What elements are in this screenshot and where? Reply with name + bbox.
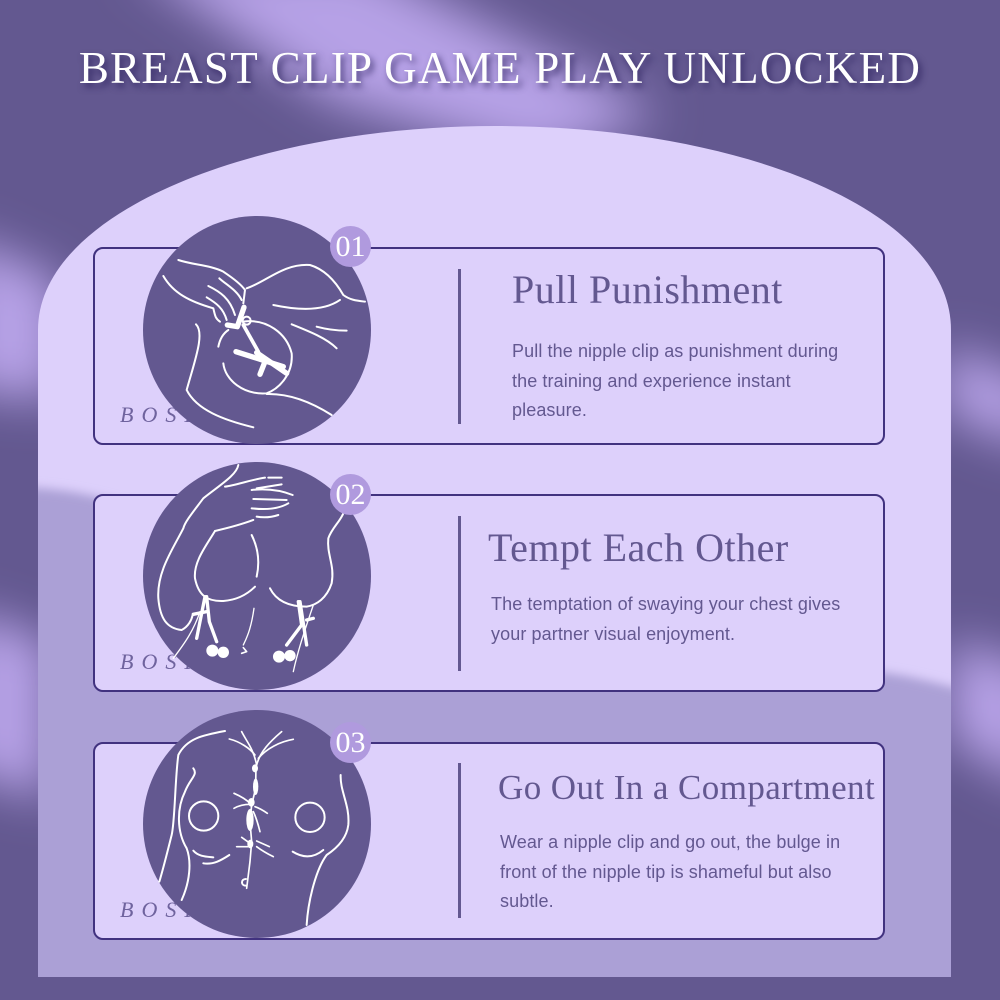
- badge 02: [330, 474, 371, 515]
- divider 1: [458, 269, 461, 424]
- watermark 1: BOSIN: [120, 402, 222, 427]
- text 3: front of the nipple tip is shameful but also: [500, 862, 832, 882]
- text 1: Pull the nipple clip as punishment during: [512, 341, 838, 361]
- text 3: [500, 832, 840, 911]
- heading 2: Tempt Each Other: [488, 525, 789, 570]
- text 2: [491, 594, 840, 644]
- watermark 2: BOSIN: [120, 649, 222, 674]
- divider 3: [458, 763, 461, 918]
- badge 03: 03: [336, 726, 366, 759]
- badge 02: 02: [336, 478, 366, 511]
- text 2: your partner visual enjoyment.: [491, 624, 735, 644]
- text 2: The temptation of swaying your chest gives: [491, 594, 840, 614]
- text 3: subtle.: [500, 891, 554, 911]
- badge 03: [330, 722, 371, 763]
- text 1: pleasure.: [512, 400, 587, 420]
- watermark 3: BOSIN: [120, 897, 222, 922]
- text 3: Wear a nipple clip and go out, the bulge in: [500, 832, 840, 852]
- illustration 2: chest with clips, line art: [143, 462, 371, 690]
- badge 01: [330, 226, 371, 267]
- divider 2: [458, 516, 461, 671]
- heading 1: Pull Punishment: [512, 267, 783, 312]
- illustration 3: torso with clips, line art: [143, 710, 371, 938]
- text 1: the training and experience instant: [512, 370, 791, 390]
- illustration 1: hand attaching clip, line art: [143, 216, 371, 444]
- heading 3: Go Out In a Compartment: [498, 768, 875, 807]
- card 2: [93, 494, 885, 692]
- title: BREAST CLIP GAME PLAY UNLOCKED: [79, 43, 921, 93]
- card 1: [93, 247, 885, 445]
- text 1: [512, 341, 838, 420]
- card 3: [93, 742, 885, 940]
- badge 01: 01: [336, 230, 366, 263]
